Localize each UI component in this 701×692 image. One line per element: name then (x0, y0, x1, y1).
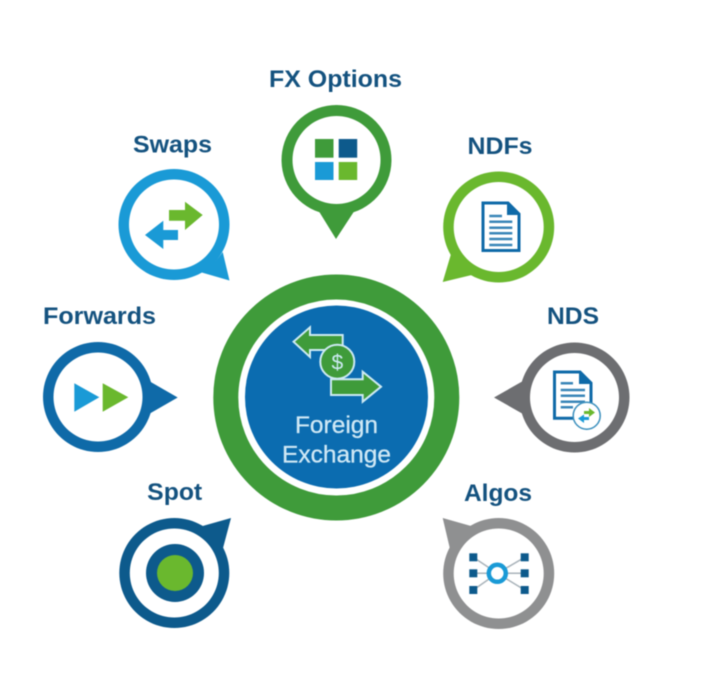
label: FX Options (269, 66, 402, 93)
item: Swaps (119, 132, 230, 280)
callout ring (43, 342, 178, 452)
icon: target (146, 544, 204, 602)
icon: currency exchange arrows: $ (331, 352, 343, 374)
hub title: Foreign (295, 412, 378, 439)
icon: four squares (315, 139, 357, 180)
hub title: Exchange (282, 442, 391, 469)
label: Forwards (43, 303, 156, 330)
icon: document (483, 202, 520, 250)
item: NDFs (443, 133, 554, 283)
callout ring (494, 342, 630, 452)
label: Swaps (133, 132, 212, 159)
item: FX Options (269, 66, 402, 239)
callout ring (119, 169, 230, 280)
icon: document with swap badge (554, 371, 600, 429)
label: Algos (464, 480, 532, 507)
hub outer ring (226, 287, 447, 508)
icon: fast-forward triangles (74, 383, 128, 412)
item: NDS (494, 303, 630, 452)
hub blue disc (245, 306, 428, 488)
icon: network with gear (469, 553, 529, 594)
icon: currency exchange arrows (294, 327, 381, 402)
item: Spot (119, 479, 231, 628)
callout ring (119, 518, 231, 628)
callout pin (282, 105, 391, 239)
central hub (226, 287, 447, 508)
label: NDS (547, 303, 599, 330)
callout ring (443, 172, 554, 283)
icon: swap arrows (145, 202, 203, 249)
label: NDFs (468, 133, 532, 160)
label: Spot (147, 479, 202, 506)
item: Algos (443, 480, 554, 629)
item: Forwards (43, 303, 178, 452)
callout ring (443, 518, 554, 629)
